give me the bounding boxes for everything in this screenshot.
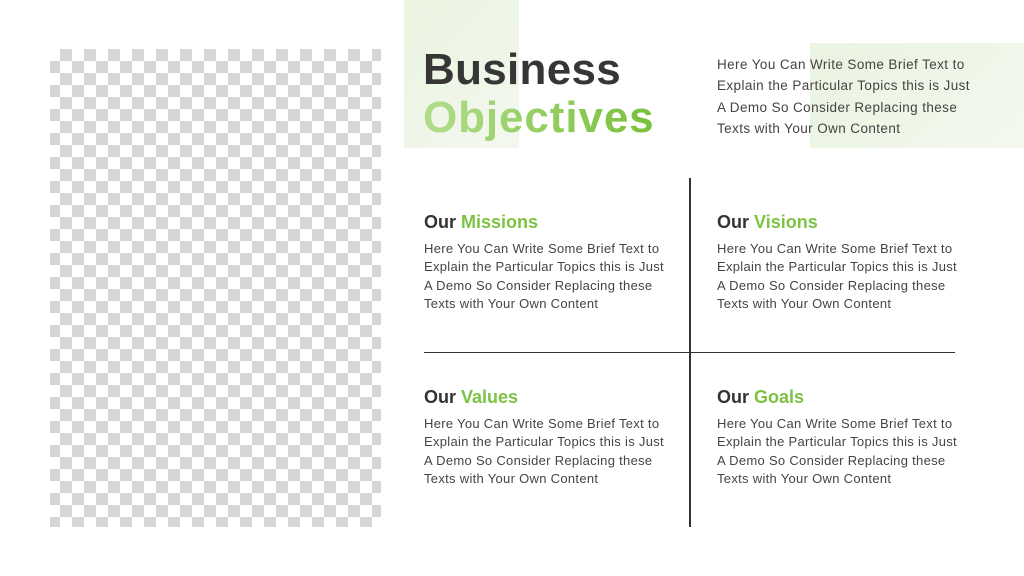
panel: goals: Here You Can Write Some Brief Text to Explain the Particular Topics this is Just A Demo So Consider Replacing these Texts with Your Own Content (717, 416, 957, 486)
panel: goals: Our Goals (717, 387, 804, 407)
panel: values: Here You Can Write Some Brief Text to Explain the Particular Topics this is Just A Demo So Consider Replacing these Texts with Your Own Content (424, 416, 664, 486)
title: Business (423, 45, 621, 94)
panel: visions: Here You Can Write Some Brief Text to Explain the Particular Topics this is Just A Demo So Consider Replacing these Texts with Your Own Content (717, 241, 957, 311)
image placeholder (50, 49, 381, 527)
title (423, 45, 655, 142)
vertical divider (689, 178, 690, 527)
panel: visions: Our Visions (717, 212, 818, 232)
panel: missions: Here You Can Write Some Brief Text to Explain the Particular Topics this is Just A Demo So Consider Replacing these Texts with Your Own Content (424, 241, 664, 311)
title: Objectives (423, 93, 655, 142)
intro text: Here You Can Write Some Brief Text to Explain the Particular Topics this is Just A Demo So Consider Replacing these Texts with Your Own Content (717, 57, 970, 136)
panel: values: Our Values (424, 387, 518, 407)
decorative green block right (810, 43, 1024, 148)
decorative green block left (404, 0, 519, 148)
horizontal divider (424, 352, 955, 353)
panel: missions: Our Missions (424, 212, 538, 232)
